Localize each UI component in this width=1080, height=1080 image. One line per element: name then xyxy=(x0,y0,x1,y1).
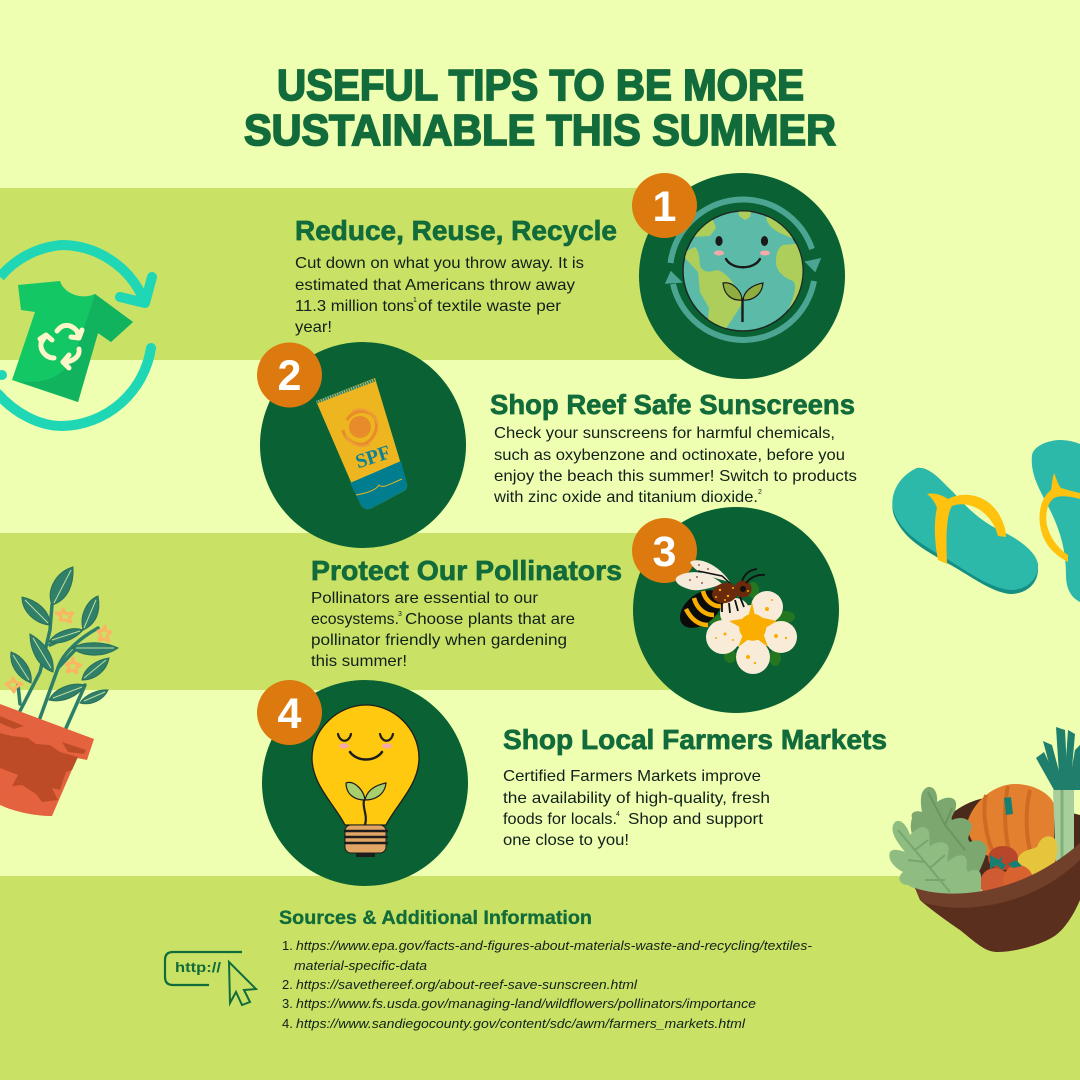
band: tip 3 xyxy=(0,533,670,690)
text: tip 1 body: Cut down on what you throw away. It is xyxy=(295,255,584,272)
title: SUSTAINABLE THIS SUMMER xyxy=(244,106,836,155)
badge: number 2 xyxy=(257,342,322,408)
badge: number 4 xyxy=(257,680,322,745)
text: tip 1 body: 11.3 million tons xyxy=(295,298,414,315)
heading: reduce reuse recycle: Reduce, Reuse, Recycle xyxy=(295,215,617,246)
icon: vegetable basket xyxy=(889,727,1080,952)
circle: green disc xyxy=(633,507,839,713)
text: tip 4 body xyxy=(503,768,770,849)
text: source list: https://www.epa.gov/facts-and-figures-about-materials-waste-and-recycling/textiles- xyxy=(296,938,813,953)
text: source list: 3. xyxy=(282,996,293,1011)
text: tip 4 body: 4 xyxy=(616,811,620,818)
text: tip 4 body: Certified Farmers Markets improve xyxy=(503,768,761,785)
badge: number 1 xyxy=(632,173,697,238)
badge: number 3 xyxy=(632,518,697,583)
text: tip 3 body: 3 xyxy=(398,611,402,618)
badge: number 1: 1 xyxy=(653,183,676,231)
text: tip 3 body: Choose plants that are xyxy=(405,611,575,628)
text: tip 4 body: the availability of high-quality, fresh xyxy=(503,790,770,807)
text: tip 1 body: estimated that Americans throw away xyxy=(295,277,575,294)
icon: recycled t-shirt xyxy=(0,245,152,426)
panel: tip 1 xyxy=(295,173,845,379)
circle: smiling earth xyxy=(639,173,845,379)
text: tip 2 body xyxy=(493,425,857,506)
circle: sunscreen tube: SPF xyxy=(353,441,393,473)
text: source list: 1. xyxy=(282,938,293,953)
text: source list xyxy=(282,938,813,1031)
text: tip 1 body xyxy=(295,255,584,336)
title xyxy=(244,61,836,155)
text: tip 2 body: enjoy the beach this summer! Switch to products xyxy=(494,468,857,485)
text: source list: https://www.sandiegocounty.gov/content/sdc/awm/farmers_markets.html xyxy=(296,1016,746,1031)
icon: potted plant xyxy=(0,567,118,816)
text: tip 3 body: ecosystems. xyxy=(311,611,399,628)
text: tip 2 body: such as oxybenzone and octinoxate, before you xyxy=(494,447,845,464)
heading: protect our pollinators: Protect Our Pollinators xyxy=(311,555,622,586)
text: source list: 2. xyxy=(282,977,293,992)
heading: shop reef safe sunscreens: Shop Reef Safe Sunscreens xyxy=(490,389,855,420)
text: tip 4 body: foods for locals. xyxy=(503,811,617,828)
text: tip 3 body: this summer! xyxy=(311,653,407,670)
text: tip 3 body: pollinator friendly when gardening xyxy=(311,632,567,649)
heading: shop local farmers markets: Shop Local Farmers Markets xyxy=(503,724,887,755)
text: tip 2 body: Check your sunscreens for harmful chemicals, xyxy=(494,425,835,442)
panel: tip 3 xyxy=(311,507,839,713)
text: source list: material-specific-data xyxy=(294,958,427,973)
circle: light bulb xyxy=(262,680,468,886)
text: source list: 4. xyxy=(282,1016,293,1031)
text: source list: https://savethereef.org/about-reef-save-sunscreen.html xyxy=(296,977,638,992)
badge: number 4: 4 xyxy=(278,690,302,738)
icon: http cursor: http:// xyxy=(175,959,221,975)
text: source list: https://www.fs.usda.gov/managing-land/wildflowers/pollinators/importance xyxy=(296,996,756,1011)
panel: tip 4 xyxy=(257,680,887,886)
badge: number 2: 2 xyxy=(278,352,301,400)
band: tip 1 xyxy=(0,188,680,360)
text: tip 4 body: one close to you! xyxy=(503,832,629,849)
text: tip 4 body: Shop and support xyxy=(628,811,764,828)
icon: flip flops xyxy=(892,440,1080,602)
circle: sunscreen tube xyxy=(260,342,466,548)
title: USEFUL TIPS TO BE MORE xyxy=(277,61,804,110)
text: tip 2 body: 2 xyxy=(758,489,762,496)
text: tip 2 body: with zinc oxide and titanium dioxide. xyxy=(493,489,758,506)
icon: http cursor xyxy=(165,952,256,1005)
badge: number 3: 3 xyxy=(653,528,676,576)
icon: bee on flower xyxy=(673,560,797,674)
text: tip 1 body: of textile waste per xyxy=(418,298,562,315)
text: tip 3 body: Pollinators are essential to our xyxy=(311,590,539,607)
heading: sources: Sources & Additional Information xyxy=(279,908,592,929)
band: sources footer xyxy=(0,876,1080,1080)
text: tip 1 body: year! xyxy=(295,319,332,336)
text: tip 1 body: 1 xyxy=(413,297,417,304)
text: tip 3 body xyxy=(311,590,575,670)
panel: tip 2 xyxy=(257,342,857,548)
